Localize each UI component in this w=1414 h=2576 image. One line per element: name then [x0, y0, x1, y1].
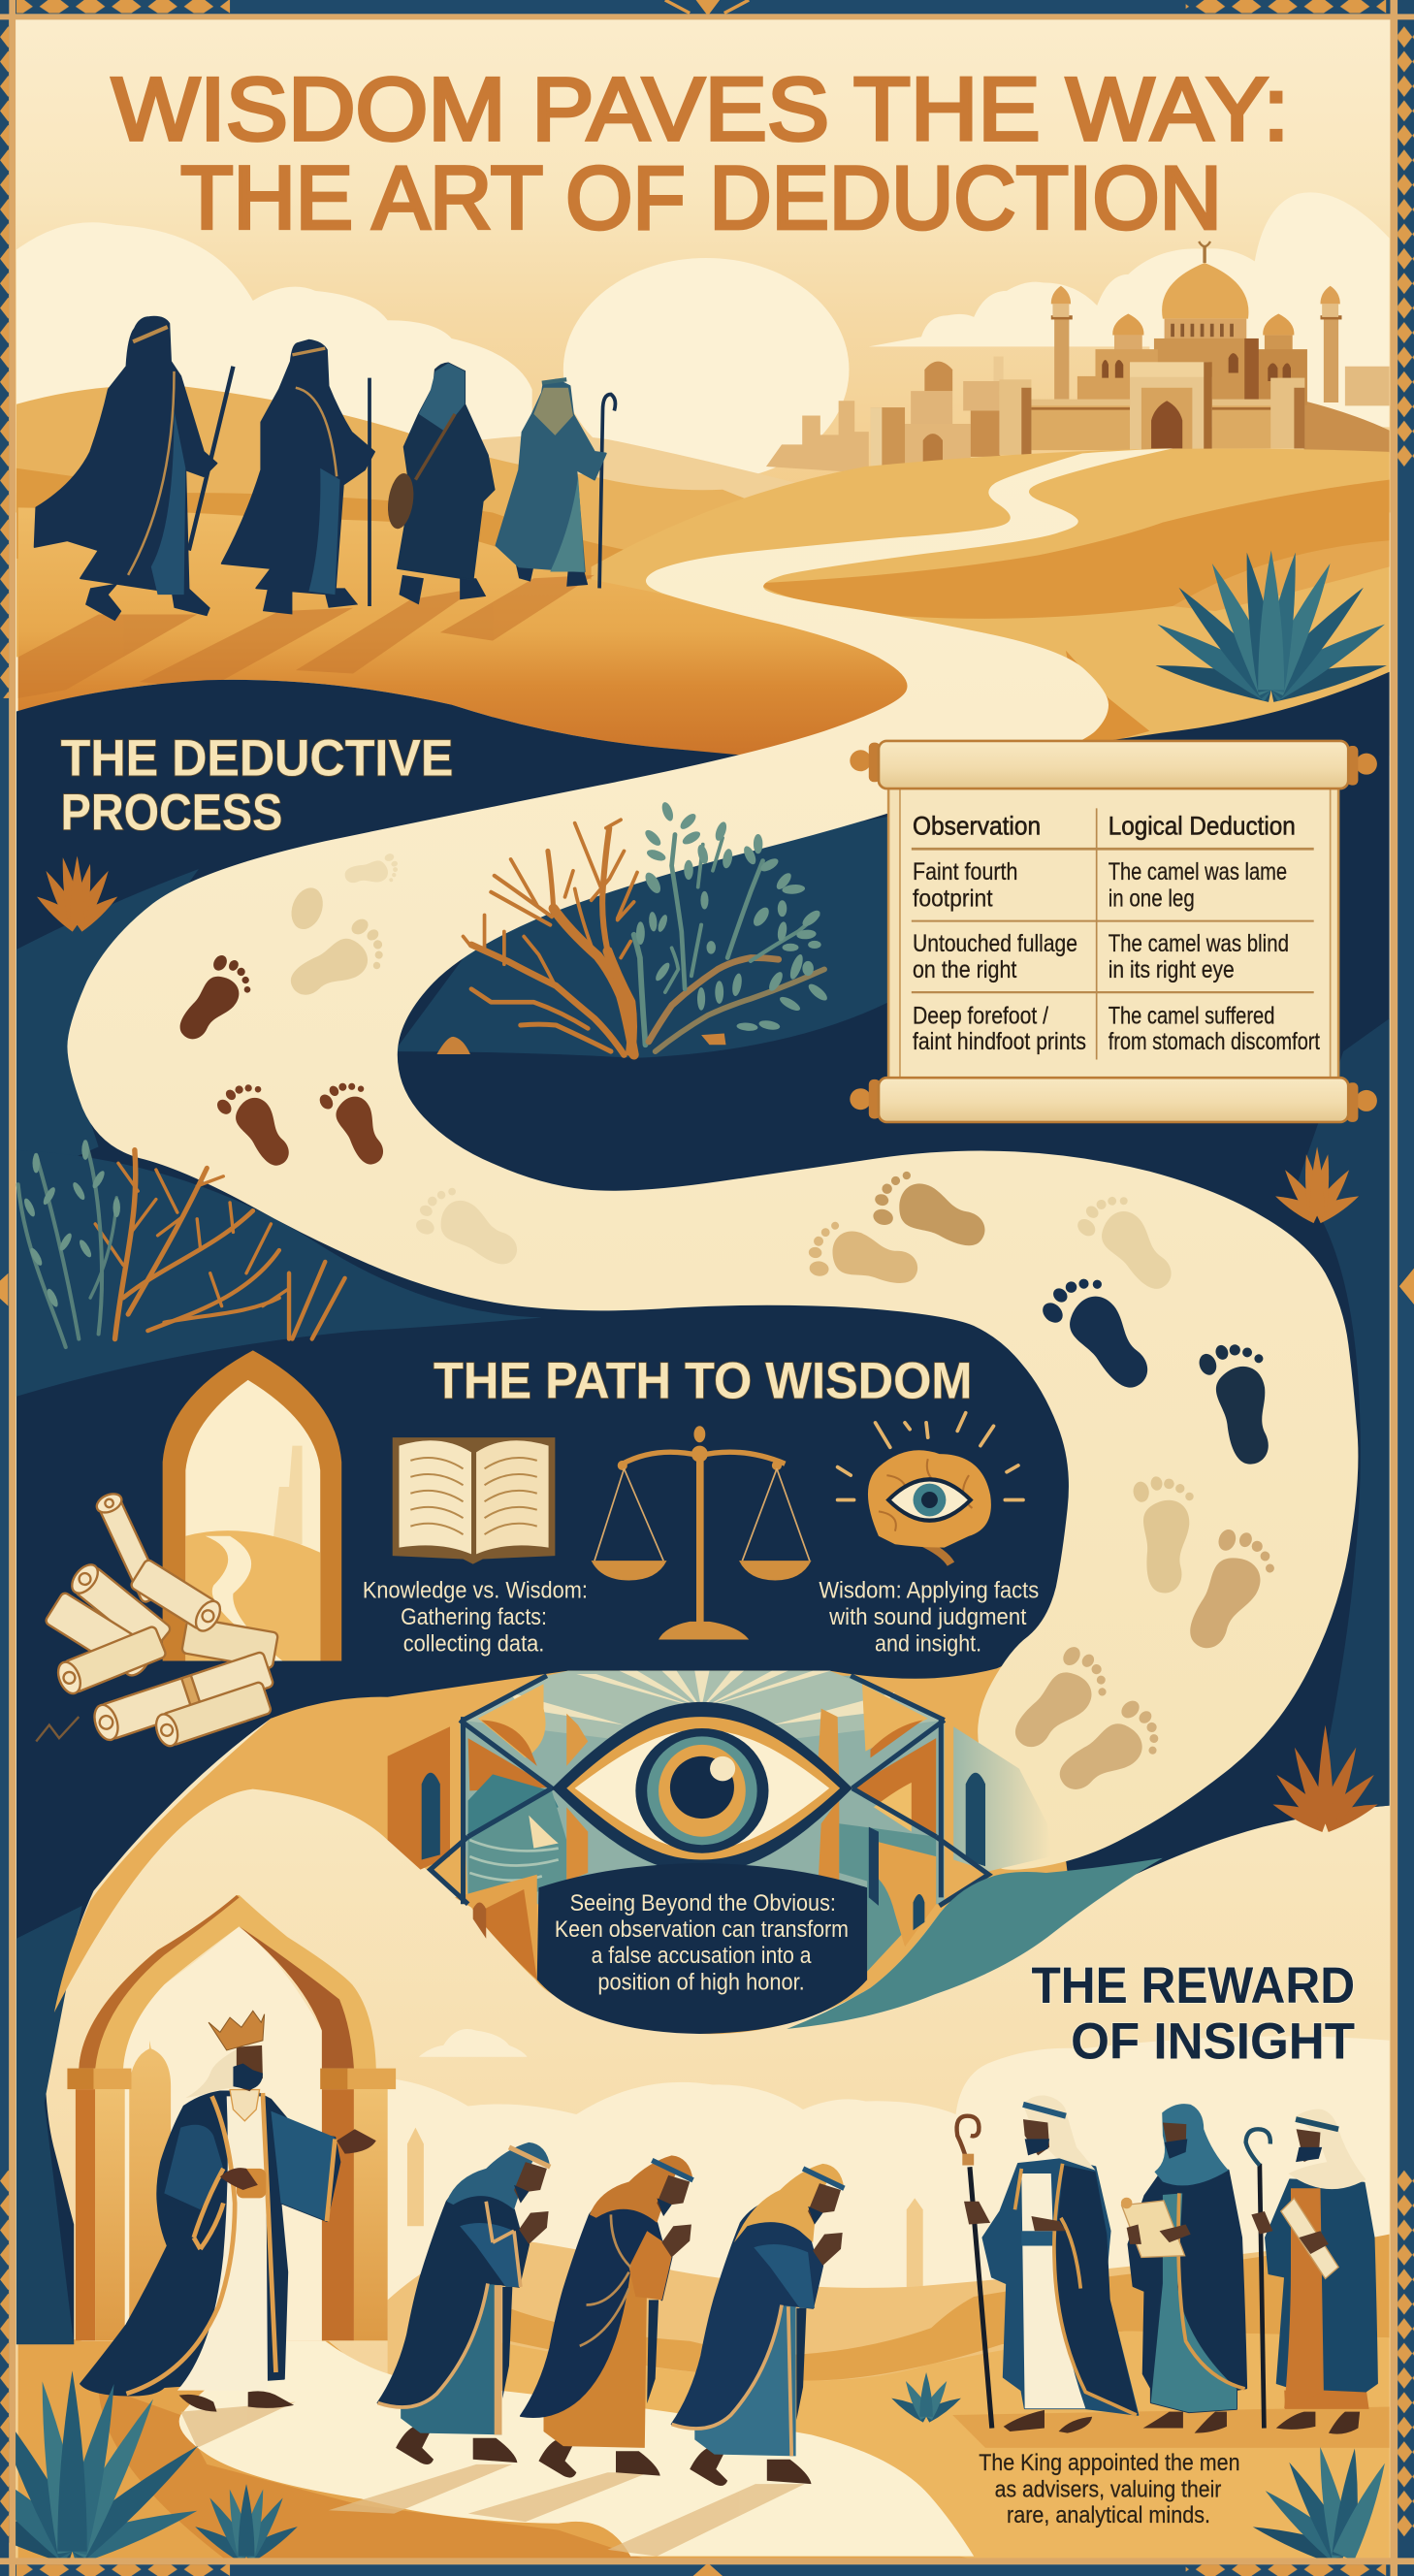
castle: walls and towers: [999, 378, 1304, 455]
small rocks: [436, 1033, 725, 1054]
castle: main dome and drum: [1112, 242, 1294, 350]
footstep shadows on bottom path: [180, 2401, 805, 2557]
walker shadows: [18, 575, 595, 698]
title: THE ART OF DEDUCTION: [180, 148, 1222, 247]
scroll: top roller: [850, 741, 1377, 789]
table row 1: Faint fourth: [913, 858, 1017, 886]
castle: right blocks: [1304, 367, 1390, 454]
text: wisdom applying facts: with sound judgment: [828, 1605, 1027, 1630]
text: wisdom applying facts: Wisdom: Applying facts: [819, 1579, 1039, 1604]
top sky: [15, 19, 1391, 512]
bottom scene dunes: [18, 2235, 1390, 2562]
agave plant: bottom left: [0, 2370, 208, 2564]
grass tuft: lower right: [1269, 1725, 1381, 1832]
adviser 3: orange under-robe: [1284, 2391, 1369, 2409]
title: WISDOM PAVES THE WAY:: [112, 60, 1289, 159]
adviser 3: hands: [1251, 2211, 1329, 2254]
stack of scrolls: [36, 1490, 278, 1749]
king: head cloth: [185, 2048, 240, 2098]
adviser 1: feet: [1004, 2410, 1092, 2433]
text: knowledge vs wisdom: Gathering facts:: [401, 1605, 547, 1630]
navy text bubble: seeing beyond the obvious: position of high honor.: [597, 1970, 805, 1995]
bowing man 2: [521, 2155, 693, 2478]
castle skyline: [766, 242, 1390, 473]
teal swoosh below path: [787, 1858, 1163, 2029]
navy text bubble: seeing beyond the obvious: a false accusation into a: [592, 1944, 812, 1969]
adviser 3: robe: [1266, 2179, 1377, 2392]
table row 3: [913, 1002, 1320, 1055]
agave plant: bottom right: [1249, 2445, 1396, 2566]
table row 3: Deep forefoot /: [913, 1002, 1049, 1029]
bowing man 1: [377, 2142, 550, 2464]
agave plant: center small: [888, 2372, 964, 2423]
table row 2: in its right eye: [1109, 956, 1235, 983]
traveler 3: [385, 363, 495, 604]
clouds: top sky: [16, 192, 1390, 493]
king: gold trim: [126, 2093, 335, 2394]
bottom winding path: [179, 2341, 974, 2557]
adviser 2: paper: [1122, 2201, 1185, 2257]
winding cream path: [67, 448, 1358, 1870]
king: face and beard: [237, 2045, 263, 2091]
navy text bubble: seeing beyond the obvious: [537, 1863, 867, 2034]
eye panel: teal back with rays: [460, 1676, 945, 1904]
bottom scene sky: [15, 1742, 1391, 2562]
eye panel: right architecture: [818, 1684, 936, 1972]
adviser 1: robe: [982, 2159, 1139, 2415]
eye panel: frame lines: [431, 1676, 988, 1906]
eye panel: left architecture: [455, 1684, 588, 1980]
king: sleeves: [271, 2111, 335, 2221]
eye panel: outside walls: [388, 1726, 1051, 1871]
table row 3: The camel suffered: [1109, 1002, 1274, 1029]
castle: main block: [1077, 338, 1307, 410]
king: collar: [230, 2090, 260, 2121]
table header: Logical Deduction: [1109, 810, 1296, 840]
title: [112, 60, 1289, 247]
shrub: orange branches: [464, 820, 637, 1054]
adviser 1: trim and sleeve: [1015, 2164, 1137, 2415]
table row 1: The camel was lame: [1109, 858, 1287, 886]
king: robe: [80, 2091, 340, 2396]
table row 2: Untouched fullage: [913, 930, 1077, 957]
adviser 2: robe: [1128, 2166, 1246, 2412]
footprints along the path: [173, 853, 1296, 1813]
table row 3: from stomach discomfort: [1109, 1028, 1320, 1055]
arch: gold band: [79, 1895, 376, 2069]
adviser 1: [957, 2095, 1139, 2433]
icon: balance scales: [592, 1426, 812, 1639]
heading: the reward of insight: THE REWARD: [1031, 1957, 1355, 2014]
table row 1: [913, 858, 1287, 912]
king: crown: [209, 2011, 265, 2050]
adviser 2: teal hood and scarf: [1154, 2104, 1229, 2185]
grass tuft: left: [32, 855, 122, 932]
castle: minarets: [1051, 276, 1341, 402]
adviser 1: staff: [970, 2167, 992, 2429]
navy field: lighter teal hills: [16, 817, 1390, 2344]
text: king appointed the men: rare, analytical minds.: [1007, 2503, 1210, 2528]
table grid: [912, 808, 1314, 1060]
adviser 2: teal tunic: [1151, 2193, 1237, 2412]
agave plant: bottom small: [191, 2484, 302, 2563]
king: feet: [179, 2391, 294, 2412]
table header: Observation: [913, 810, 1041, 840]
adviser 2: feet: [1143, 2412, 1227, 2433]
adviser 2: [1121, 2104, 1246, 2433]
adviser 1: hands: [964, 2202, 1066, 2231]
grass tuft: right: [1272, 1146, 1363, 1223]
arch: domed tower silhouette: [129, 2041, 171, 2341]
heading: the deductive process: [61, 730, 453, 841]
table row 2: on the right: [913, 956, 1016, 983]
arch: cream opening: [123, 1927, 322, 2341]
castle: gate: [1130, 362, 1212, 450]
bowing man 3: [672, 2164, 844, 2486]
golden dune under the eye: [54, 1646, 1068, 2034]
adviser 3: staff: [1260, 2164, 1264, 2429]
heading: the deductive process: PROCESS: [61, 784, 282, 841]
traveler 1: [35, 317, 233, 621]
king: bowl and hands: [237, 2169, 266, 2198]
lower-left shrub: [18, 1141, 345, 1347]
palace arch behind king: [67, 1895, 396, 2341]
traveler 2: [222, 340, 374, 615]
central shrub: [436, 801, 829, 1054]
eye: concentric lens and iris: [552, 1702, 852, 1873]
shrub: leaves: [636, 801, 829, 1032]
text: knowledge vs wisdom: Knowledge vs. Wisdom:: [363, 1579, 588, 1604]
eye panel with architecture: [388, 1671, 1051, 1980]
adviser 2: hands: [1127, 2225, 1191, 2244]
scroll: bottom roller: [850, 1078, 1377, 1122]
heading: the path to wisdom: THE PATH TO WISDOM: [434, 1352, 972, 1409]
foreground dune: [18, 507, 912, 756]
adviser 3: face and beard: [1297, 2129, 1320, 2162]
arch: orange shaded bands: [79, 1895, 240, 2069]
table row 2: [913, 930, 1289, 983]
adviser 3: feet: [1276, 2412, 1360, 2434]
table header: [913, 810, 1296, 840]
icon: open book: [393, 1437, 555, 1564]
text: wisdom applying facts: [819, 1579, 1039, 1657]
navy text bubble: seeing beyond the obvious: Keen observation can transform: [555, 1917, 849, 1943]
king: [80, 2011, 376, 2412]
arch doorway with desert view: [163, 1350, 341, 1661]
text: king appointed the men: The King appointed the men: [979, 2451, 1240, 2476]
heading: the reward of insight: OF INSIGHT: [1071, 2012, 1355, 2070]
text: wisdom applying facts: and insight.: [875, 1631, 981, 1657]
agave plant: top right: [1151, 550, 1392, 702]
travelers: four walking figures: [35, 317, 615, 621]
shrub: green branches: [634, 834, 824, 1051]
scroll with observation / deduction table: [850, 741, 1377, 1122]
main navy field: [16, 672, 1390, 2344]
scroll: parchment body: [888, 786, 1338, 1084]
distant towers: [407, 2128, 923, 2292]
table row 1: in one leg: [1109, 885, 1195, 912]
navy text bubble: seeing beyond the obvious: Seeing Beyond the Obvious:: [570, 1891, 836, 1916]
clouds: bottom scene: [388, 2029, 1390, 2316]
text: knowledge vs wisdom: [363, 1579, 588, 1657]
adviser 2: face and beard: [1163, 2122, 1186, 2157]
heading: the reward of insight: [1031, 1957, 1355, 2070]
desert dunes: [16, 385, 1390, 756]
text: knowledge vs wisdom: collecting data.: [403, 1631, 544, 1657]
traveler 4: [496, 379, 615, 588]
table row 2: The camel was blind: [1109, 930, 1289, 957]
adviser 1: face and beard: [1023, 2119, 1049, 2155]
heading: the deductive process: THE DEDUCTIVE: [61, 730, 453, 788]
icon: brain with eye and rays: [838, 1413, 1023, 1564]
text: king appointed the men: as advisers, valuing their: [995, 2478, 1221, 2503]
adviser 3: scroll: [1281, 2198, 1338, 2278]
text: king appointed the men: [979, 2451, 1240, 2528]
table row 1: footprint: [913, 885, 993, 912]
adviser 1: white tunic: [1021, 2174, 1085, 2408]
arch: capitals: [67, 2069, 94, 2089]
adviser 3: [1246, 2109, 1377, 2434]
castle: left town blocks: [766, 357, 1004, 473]
adviser 3: headcloth and scarf: [1288, 2109, 1366, 2189]
adviser 1: headcloth: [1023, 2095, 1095, 2171]
king: white tunic: [177, 2096, 268, 2391]
table row 3: faint hindfoot prints: [913, 1028, 1086, 1055]
arch: pillars: [76, 2089, 95, 2340]
adviser 1: dark front panel: [1054, 2166, 1139, 2415]
